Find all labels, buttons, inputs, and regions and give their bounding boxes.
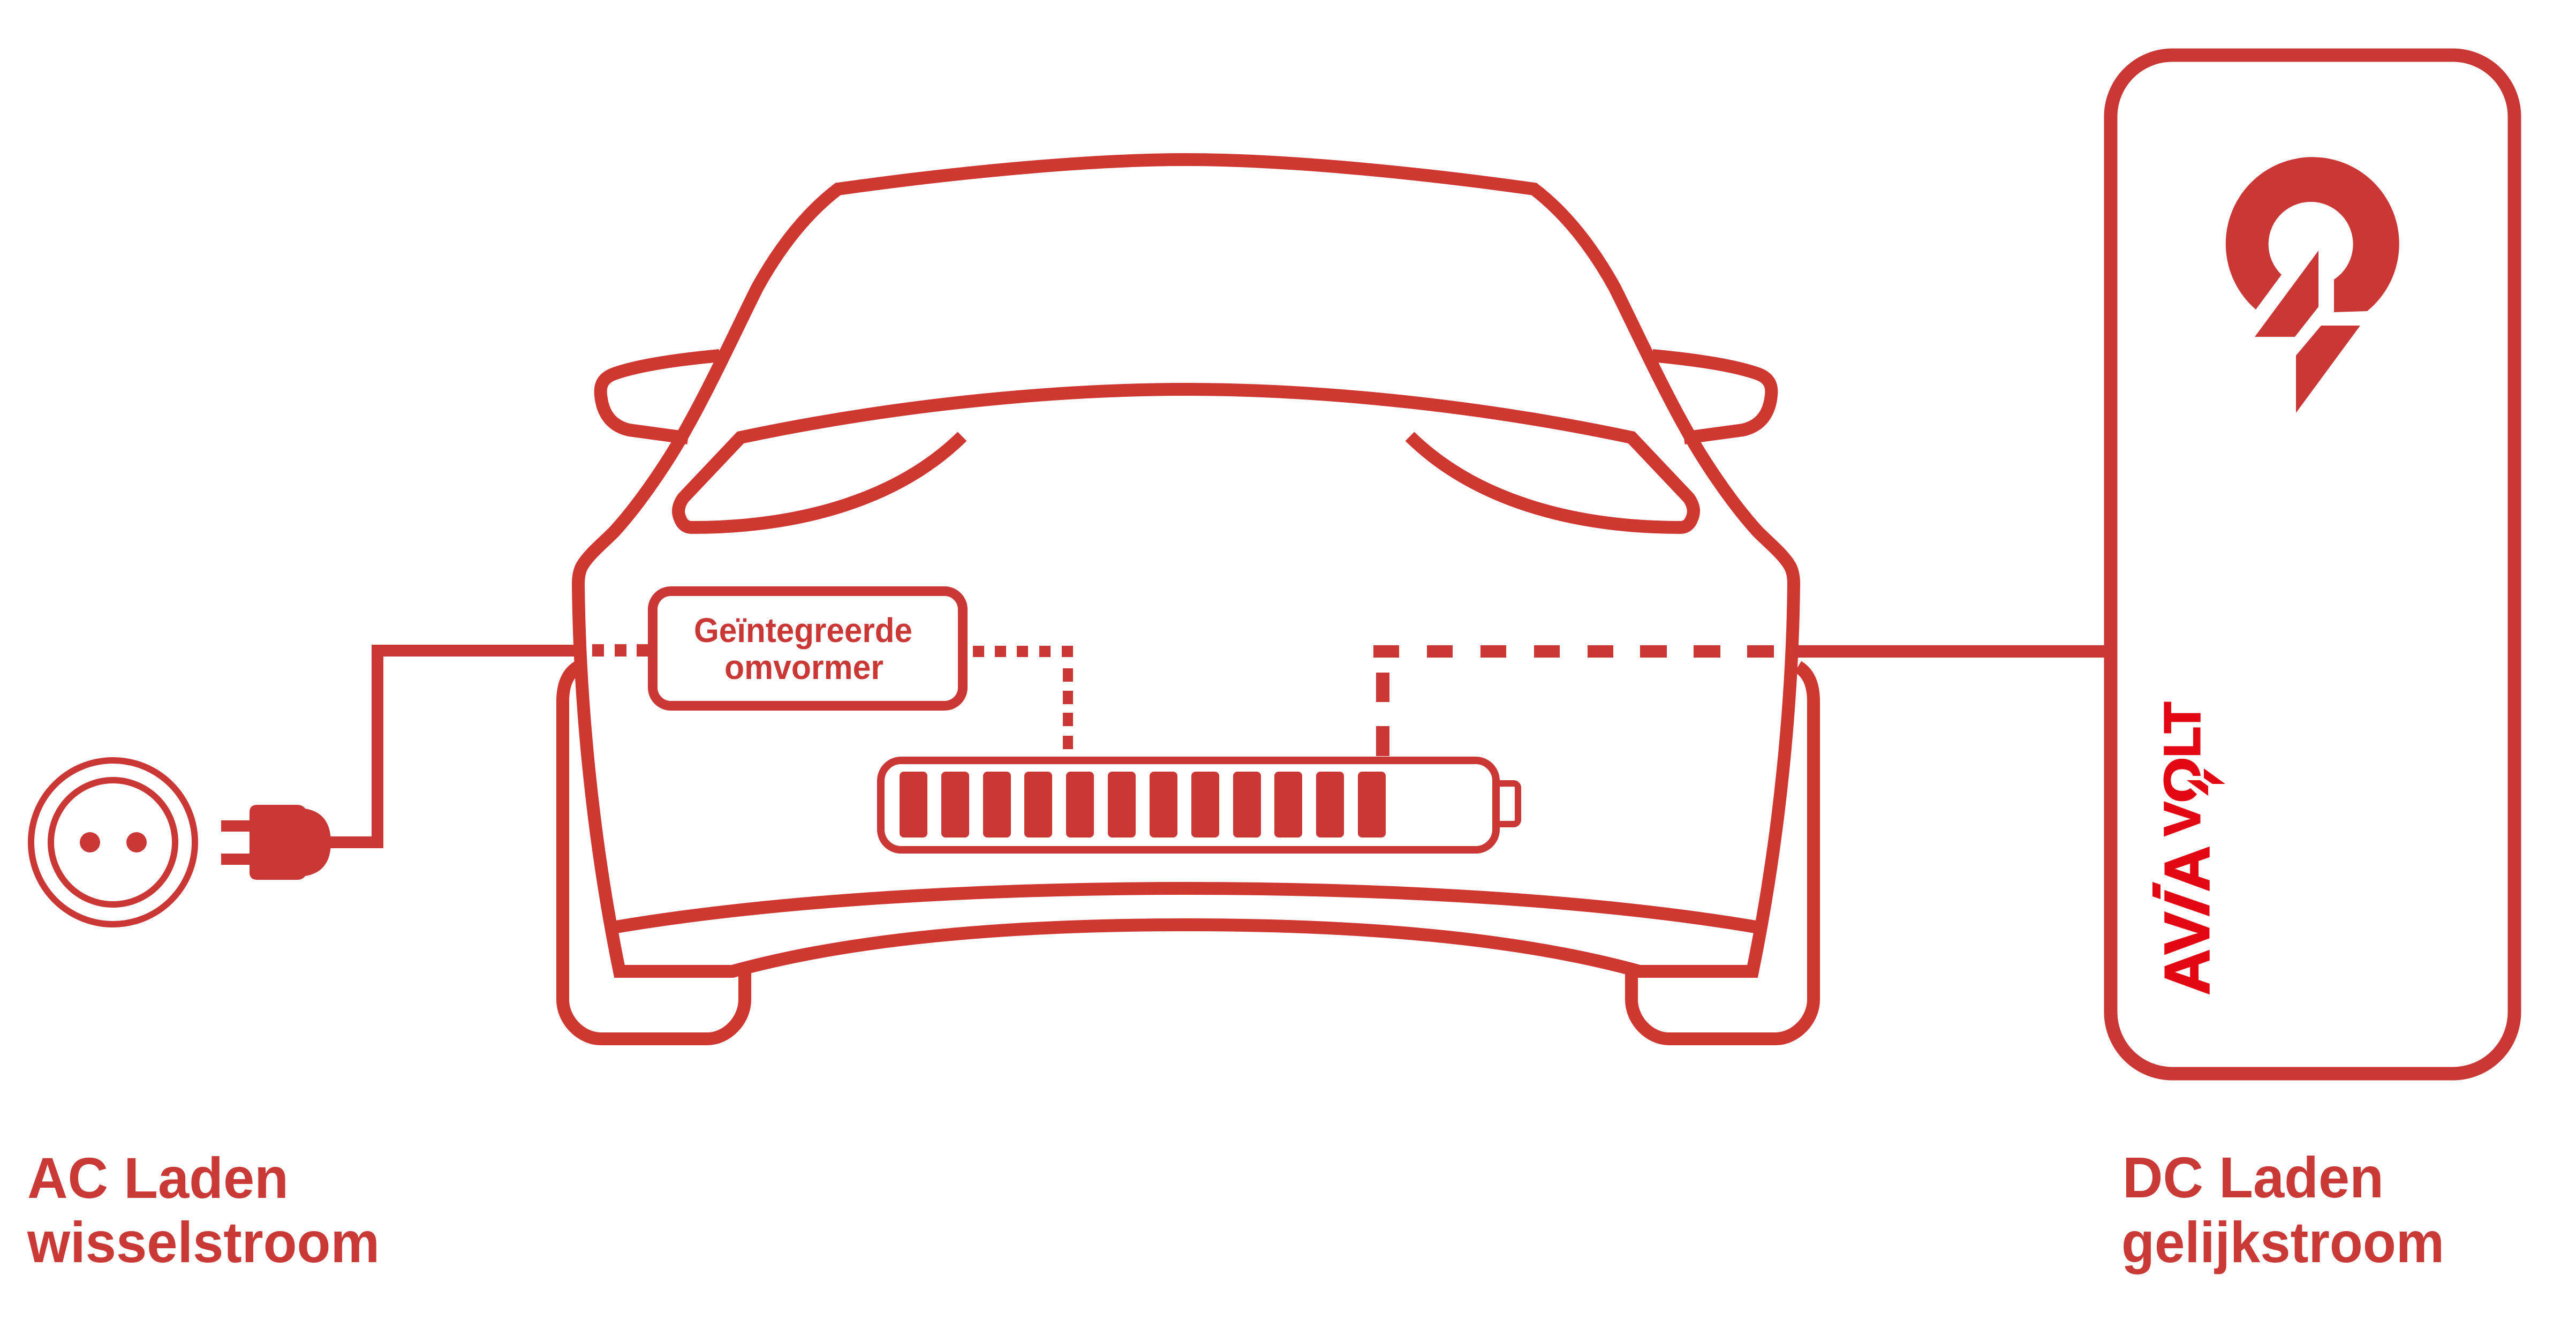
AVIA VOLT logo: O [2154, 757, 2211, 803]
inverter box with label [653, 591, 963, 706]
label: DC charging: gelijkstroom [2121, 1210, 2444, 1274]
inverter box with label: omvormer [724, 648, 883, 686]
AVIA VOLT logo: A [2152, 949, 2223, 995]
label: AC charging [27, 1145, 380, 1274]
AVIA VOLT logo: L [2154, 727, 2211, 758]
car outline [563, 160, 1814, 1039]
AVIA VOLT logo: V [2154, 802, 2211, 836]
plug icon [221, 805, 331, 880]
label: DC charging: DC Laden [2122, 1145, 2384, 1210]
DC charging station [2111, 55, 2514, 1074]
DC cable [1794, 645, 2107, 658]
wall socket icon [31, 760, 195, 924]
AC cable [327, 651, 574, 842]
AVIA VOLT logo: A [2152, 846, 2223, 892]
battery [881, 760, 1518, 850]
label: AC charging: AC Laden [27, 1145, 289, 1210]
AVIA VOLT logo: I [2151, 882, 2222, 924]
dashed DC connection to battery [1373, 645, 1774, 756]
label: AC charging: wisselstroom [27, 1210, 380, 1274]
AVIA VOLT logo: T [2154, 702, 2211, 733]
AVIA VOLT logo [2151, 702, 2225, 995]
AC dotted connection to inverter [592, 644, 648, 657]
label: DC charging [2121, 1145, 2444, 1274]
icon: charging station logo [2226, 157, 2399, 413]
dotted line inverter to battery [973, 646, 1073, 749]
inverter box with label: Geïntegreerde [694, 611, 912, 650]
AVIA VOLT logo: V [2152, 912, 2223, 954]
